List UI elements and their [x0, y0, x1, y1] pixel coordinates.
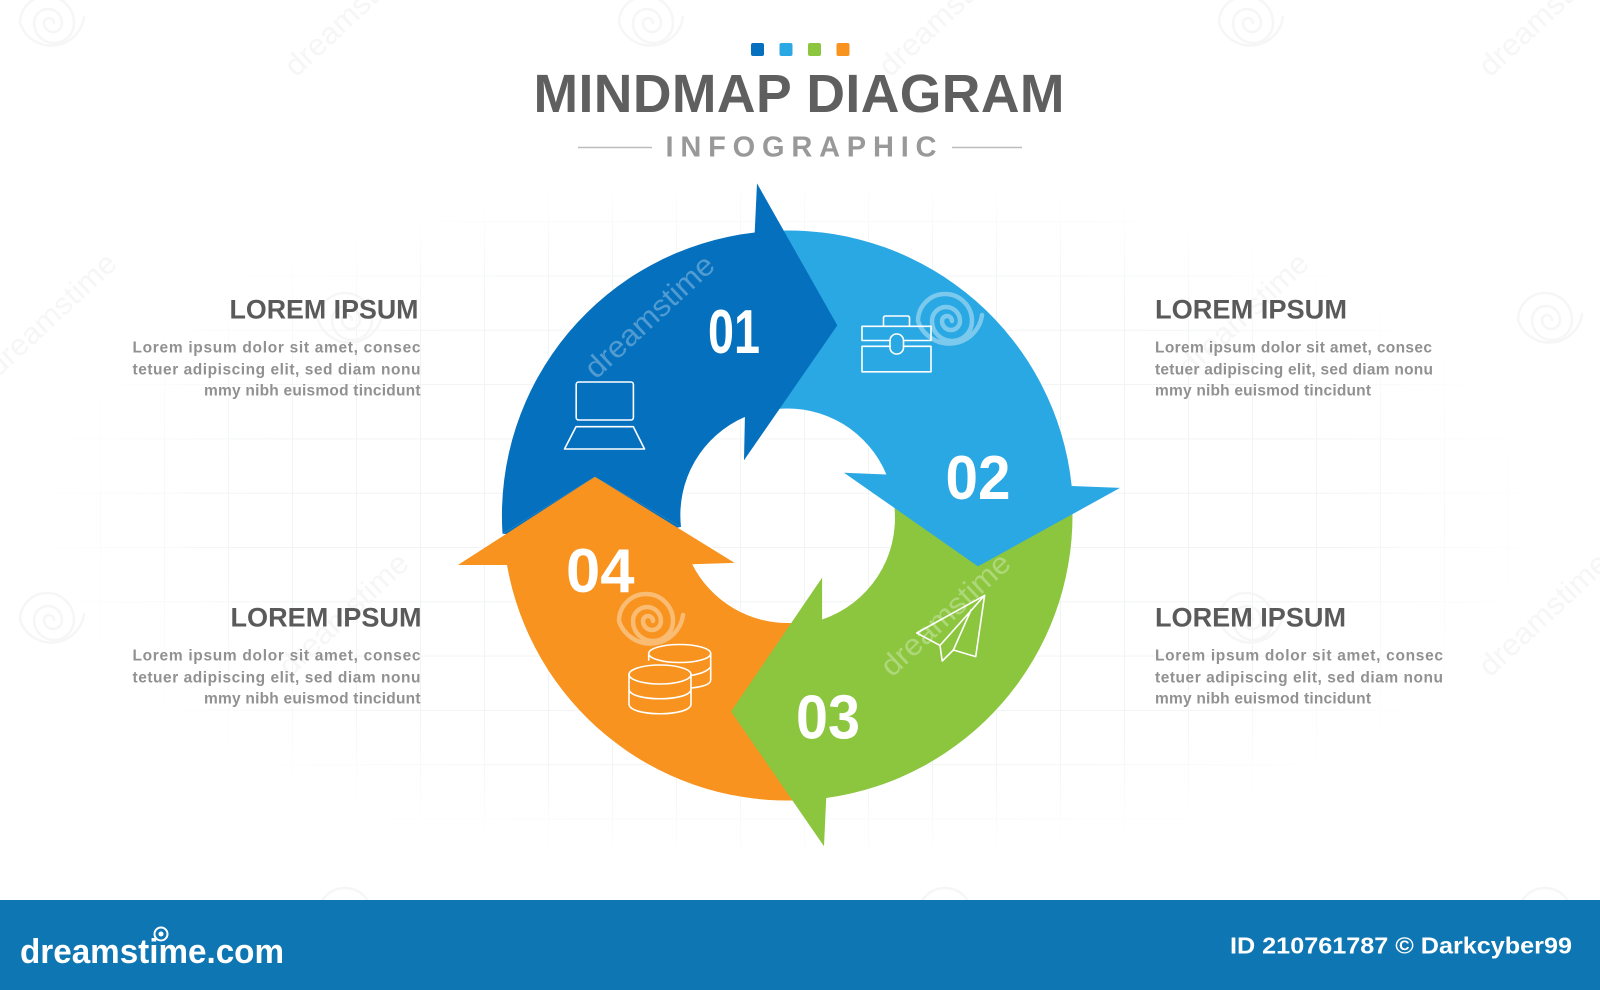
- text block: bottom right: tetuer adipiscing elit, sed diam nonu: [1155, 670, 1443, 687]
- icon: laptop: [564, 382, 644, 449]
- number 04: 04: [566, 537, 635, 606]
- text block: top left: LOREM IPSUM: [230, 294, 418, 324]
- text block: top right: mmy nibh euismod tincidunt: [1155, 383, 1371, 400]
- text block: bottom left: [132, 603, 422, 708]
- text block: bottom left: mmy nibh euismod tincidunt: [204, 691, 420, 708]
- text block: top left: Lorem ipsum dolor sit amet, consec: [132, 340, 421, 357]
- arrow 04 orange: [458, 477, 793, 801]
- text block: top right: Lorem ipsum dolor sit amet, consec: [1155, 340, 1432, 357]
- text block: top left: [132, 294, 421, 400]
- icon: coins: [629, 644, 711, 714]
- text: dreamstime: [272, 546, 415, 683]
- circular arrow diagram: [458, 183, 1120, 846]
- text block: bottom left: LOREM IPSUM: [230, 603, 422, 633]
- circular arrow diagram: dreamstime: [578, 248, 721, 385]
- text block: bottom left: Lorem ipsum dolor sit amet, consec: [132, 648, 421, 665]
- text block: bottom right: mmy nibh euismod tincidunt: [1155, 691, 1371, 708]
- text block: bottom right: Lorem ipsum dolor sit amet, consec: [1155, 648, 1443, 665]
- number 02: 02: [946, 444, 1010, 513]
- text block: top left: mmy nibh euismod tincidunt: [204, 383, 420, 400]
- icon: paper plane: [917, 595, 985, 661]
- arrow 03 green: [731, 508, 1073, 846]
- text block: top right: tetuer adipiscing elit, sed diam nonu: [1155, 362, 1433, 379]
- arrow 01 dark blue: [502, 183, 837, 534]
- title: MINDMAP DIAGRAM: [534, 65, 1064, 124]
- text: dreamstime: [1172, 246, 1315, 383]
- text block: bottom right: [1155, 603, 1443, 708]
- footer band: [0, 900, 1600, 990]
- text block: bottom left: tetuer adipiscing elit, sed diam nonu: [132, 670, 420, 687]
- footer credit: ID 210761787 © Darkcyber99: [1230, 932, 1572, 958]
- text block: bottom right: LOREM IPSUM: [1155, 603, 1346, 633]
- title color dots: [751, 43, 850, 56]
- number 03: 03: [796, 684, 860, 752]
- text block: top right: LOREM IPSUM: [1155, 294, 1347, 324]
- subtitle: INFOGRAPHIC: [666, 132, 937, 164]
- text block: top left: tetuer adipiscing elit, sed diam nonu: [132, 362, 420, 379]
- footer logo: dreamstime.com: [20, 933, 284, 971]
- text block: top right: [1155, 294, 1433, 400]
- number 01: 01: [708, 298, 760, 367]
- circular arrow diagram: dreamstime: [874, 546, 1017, 683]
- icon: briefcase: [862, 316, 931, 372]
- arrow 02 light blue: [778, 230, 1120, 566]
